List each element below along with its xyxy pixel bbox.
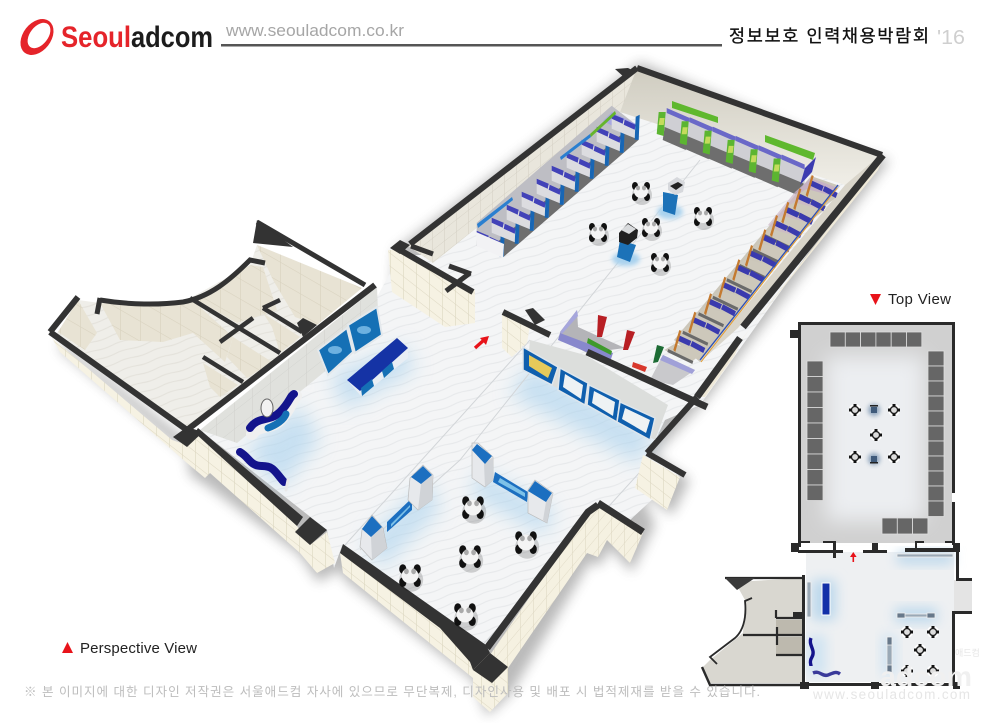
top view: lobby floor bbox=[806, 552, 972, 682]
watermark bbox=[812, 647, 980, 702]
watermark: www.seouladcom.com bbox=[812, 687, 970, 702]
booth row: back of upper hall bbox=[657, 101, 816, 196]
top view: walls bbox=[790, 322, 972, 689]
blue counter bbox=[347, 338, 408, 396]
tower and band display: right pair bbox=[472, 443, 553, 523]
floor: exhibition halls bbox=[200, 105, 860, 648]
floor: left rooms bbox=[56, 245, 362, 430]
wall: bottom-left outer face bbox=[340, 553, 508, 712]
wall tops: black lines, left rooms bbox=[50, 220, 375, 430]
wall: upper hall interior right face bbox=[700, 157, 878, 362]
wall: upper hall interior back-right face bbox=[620, 68, 882, 185]
top view: blue counter bbox=[822, 583, 830, 615]
kiosk: lower bbox=[612, 223, 640, 266]
tower and band display: left pair bbox=[360, 465, 433, 560]
wall: left rooms outer face bbox=[52, 338, 187, 463]
booth row: left side of upper hall bbox=[476, 106, 640, 258]
logo: Seouladcom: Seoul bbox=[61, 21, 131, 54]
copyright notice: ※ 본 이미지에 대한 디자인 저작권은 서울애드컴 자사에 있으므로 무단복제, 디자인사용 및 배포 시 법적제재를 받을 수 있습니다. bbox=[24, 685, 760, 699]
kiosk: upper bbox=[657, 177, 685, 219]
logo: Seouladcom bbox=[14, 13, 213, 61]
top view: lobby tables bbox=[901, 626, 939, 677]
top view: kiosks bbox=[868, 404, 880, 465]
wall: lower-left outer face bbox=[187, 433, 335, 573]
info tables: lower hall bbox=[399, 496, 539, 631]
top view: bottom booth row bbox=[882, 518, 928, 534]
legend: top view: Top View bbox=[888, 291, 951, 308]
top view: room shading bbox=[776, 620, 802, 654]
building shadow bbox=[60, 62, 890, 716]
top view: wall panels bbox=[807, 554, 953, 673]
wall: lobby interior face bbox=[200, 287, 378, 443]
floor seam lines bbox=[345, 160, 700, 650]
top view: right booth column bbox=[928, 351, 944, 516]
display wall: right of lobby bbox=[523, 340, 668, 440]
wall: upper hall outer block left of entrance bbox=[388, 250, 475, 327]
legend: perspective view: Perspective View bbox=[80, 640, 197, 657]
top view: left booth column bbox=[807, 361, 823, 500]
website address: www.seouladcom.co.kr bbox=[225, 21, 404, 40]
reception desk: curved upper bbox=[250, 394, 296, 434]
header rule bbox=[221, 44, 722, 46]
booth row: front of upper hall bbox=[558, 310, 695, 385]
wall: right lower block bbox=[635, 455, 680, 510]
wall tops: black lines, upper hall bbox=[390, 68, 883, 475]
floor: glow under displays bbox=[245, 345, 655, 570]
top view: reception desks bbox=[810, 638, 840, 675]
booth row: right side of upper hall bbox=[664, 175, 840, 364]
wall: bottom-right outer face bbox=[490, 505, 643, 668]
top view: upper hall floor bbox=[800, 325, 952, 543]
logo: Seouladcom: adcom bbox=[131, 21, 213, 54]
info tables: upper hall bbox=[589, 182, 714, 276]
reception desk: curved lower bbox=[240, 452, 288, 490]
top view: left room walls bbox=[702, 578, 802, 685]
red entrance arrow bbox=[475, 336, 489, 348]
event title: 정보보호 인력채용박람회 bbox=[729, 26, 929, 46]
top view: top booth row bbox=[830, 332, 922, 347]
wall: block right of entrance bbox=[502, 313, 530, 357]
watermark: 애드컴 bbox=[955, 647, 980, 658]
top view: left rooms floor bbox=[702, 578, 802, 683]
top view: red entrance arrow bbox=[850, 552, 857, 562]
event year: '16 bbox=[937, 27, 965, 49]
watermark: adcom bbox=[880, 661, 972, 692]
display panels: left of lobby bbox=[318, 307, 382, 375]
top view plan bbox=[702, 322, 972, 689]
left rooms interior walls bbox=[58, 245, 362, 397]
wall: upper hall right outer face bbox=[697, 158, 883, 397]
wall: upper hall interior back-left face bbox=[408, 70, 637, 263]
top view: upper tables bbox=[849, 404, 900, 463]
wall tops: black lines, lobby bbox=[173, 427, 643, 683]
